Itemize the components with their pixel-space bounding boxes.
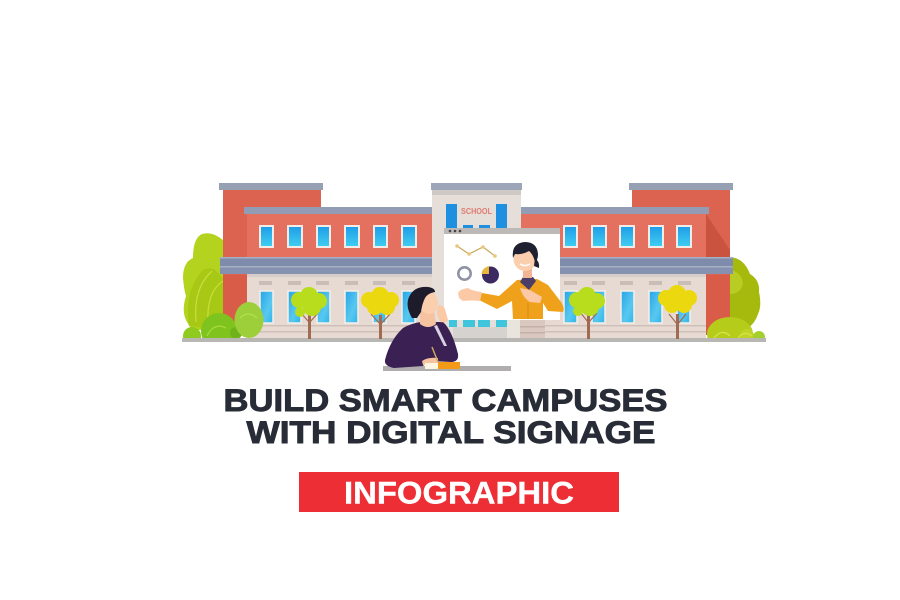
infographic badge: INFOGRAPHIC bbox=[344, 474, 574, 510]
title bbox=[224, 382, 668, 450]
tree 1 bbox=[291, 287, 327, 339]
left upper storey bbox=[244, 207, 432, 257]
school sign: SCHOOL bbox=[461, 207, 492, 216]
upper windows right bbox=[564, 226, 691, 247]
front bushes left bbox=[183, 302, 264, 338]
left tower bbox=[219, 183, 323, 335]
stone lintels bbox=[259, 281, 691, 285]
tree 3 bbox=[569, 287, 605, 339]
line chart bbox=[455, 244, 497, 258]
title: WITH DIGITAL SIGNAGE bbox=[246, 414, 656, 450]
left bushes behind building bbox=[183, 233, 223, 330]
desk bbox=[383, 366, 511, 371]
right tower bbox=[629, 183, 733, 335]
tree 4 bbox=[658, 285, 697, 339]
slate band right bbox=[521, 257, 733, 274]
tree 2 bbox=[361, 287, 399, 339]
presenter bbox=[458, 242, 564, 319]
book and pencil bbox=[425, 347, 460, 369]
front bush right bbox=[707, 317, 765, 338]
entrance block below board bbox=[449, 319, 545, 339]
pie chart bbox=[482, 266, 499, 284]
infographic canvas bbox=[182, 183, 766, 512]
ground windows bbox=[260, 291, 690, 323]
right upper storey bbox=[521, 207, 709, 257]
right bushes behind building bbox=[730, 257, 760, 330]
slate band left bbox=[220, 257, 432, 274]
upper windows left bbox=[260, 226, 416, 247]
ground floor wall bbox=[247, 274, 706, 338]
student at desk bbox=[385, 287, 460, 369]
title: BUILD SMART CAMPUSES bbox=[224, 382, 668, 418]
infographic badge bbox=[299, 472, 619, 512]
donut chart bbox=[458, 267, 471, 280]
trees bbox=[291, 285, 697, 339]
presentation board bbox=[444, 228, 564, 320]
ground strip bbox=[182, 338, 766, 342]
illustration: school building scene bbox=[182, 183, 766, 371]
central tower bbox=[431, 183, 522, 340]
